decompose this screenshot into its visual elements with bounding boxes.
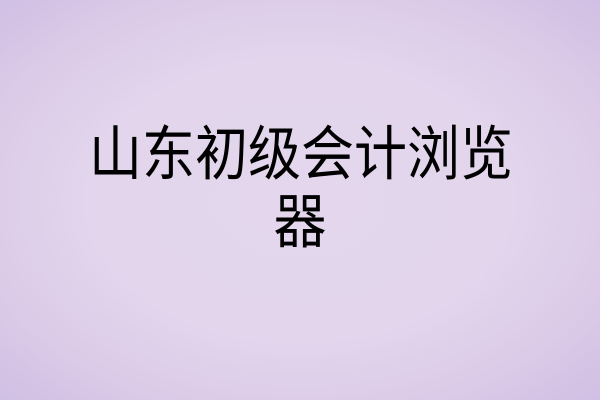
- title: 山东初级会计浏览: [89, 122, 513, 188]
- title: [89, 122, 513, 256]
- title: 器: [274, 190, 326, 256]
